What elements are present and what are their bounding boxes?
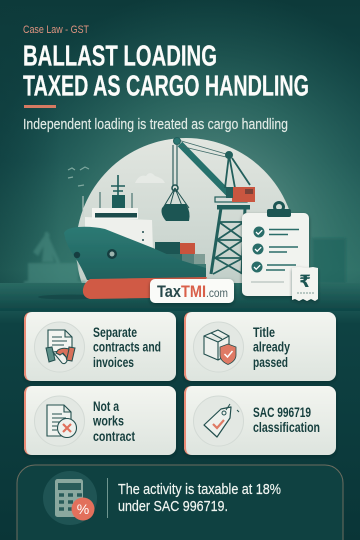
card: separate contracts xyxy=(24,312,176,381)
ship red keel xyxy=(83,277,207,299)
card text xyxy=(253,405,320,435)
icon: document with cross xyxy=(34,396,84,446)
card text: passed xyxy=(253,355,288,370)
card text: already xyxy=(253,340,290,354)
water xyxy=(0,283,360,311)
ship anchor ports xyxy=(74,249,117,259)
ship containers xyxy=(155,242,206,276)
card text: SAC 996719 xyxy=(253,405,311,420)
conclusion panel xyxy=(17,465,343,540)
distant port silhouette xyxy=(24,232,86,284)
card text: invoices xyxy=(93,355,134,370)
backdrop circle xyxy=(76,138,289,283)
card text xyxy=(93,325,161,370)
subtitle: Independent loading is treated as cargo handling xyxy=(23,116,288,133)
icon: calculator with percent xyxy=(43,471,97,525)
card text: Title xyxy=(253,325,275,340)
ship hull xyxy=(64,227,206,284)
card: SAC classification xyxy=(184,386,336,455)
divider xyxy=(107,478,108,518)
title xyxy=(23,40,309,102)
crane tower xyxy=(211,208,245,274)
logo badge: TaxTMI.com xyxy=(157,283,228,301)
icon: box with shield xyxy=(194,322,244,372)
crane cargo net xyxy=(162,145,190,221)
card text xyxy=(253,325,290,370)
card text: Separate xyxy=(93,325,137,340)
card text: Not a xyxy=(93,399,119,414)
icon: contract handshake xyxy=(34,322,84,372)
card text: contracts and xyxy=(93,340,161,354)
card text xyxy=(92,399,135,444)
card: title passed xyxy=(184,312,336,381)
rupee receipt xyxy=(292,267,318,301)
card: works contract xyxy=(24,386,176,455)
card text: classification xyxy=(253,420,320,435)
icon: calculator with percent: % xyxy=(77,501,89,517)
card text: works xyxy=(92,414,124,428)
conclusion text xyxy=(118,481,281,515)
conclusion text: The activity is taxable at 18% xyxy=(118,481,281,498)
title: BALLAST LOADING xyxy=(23,40,217,72)
ship superstructure xyxy=(83,175,153,252)
birds xyxy=(68,167,89,186)
card text: contract xyxy=(93,429,135,444)
logo badge xyxy=(150,279,234,303)
rupee receipt: ₹ xyxy=(299,272,311,292)
crane boom xyxy=(174,138,250,210)
conclusion text: under SAC 996719. xyxy=(118,498,228,515)
title accent rule xyxy=(24,105,56,108)
ship shadow xyxy=(38,294,102,300)
hero illustration xyxy=(0,137,360,311)
clouds xyxy=(135,173,165,183)
eyebrow label: Case Law - GST xyxy=(23,24,89,36)
icon: price tag xyxy=(194,396,244,446)
distant right skyline xyxy=(312,238,346,284)
clipboard xyxy=(242,202,309,296)
crane machine house xyxy=(226,187,255,202)
